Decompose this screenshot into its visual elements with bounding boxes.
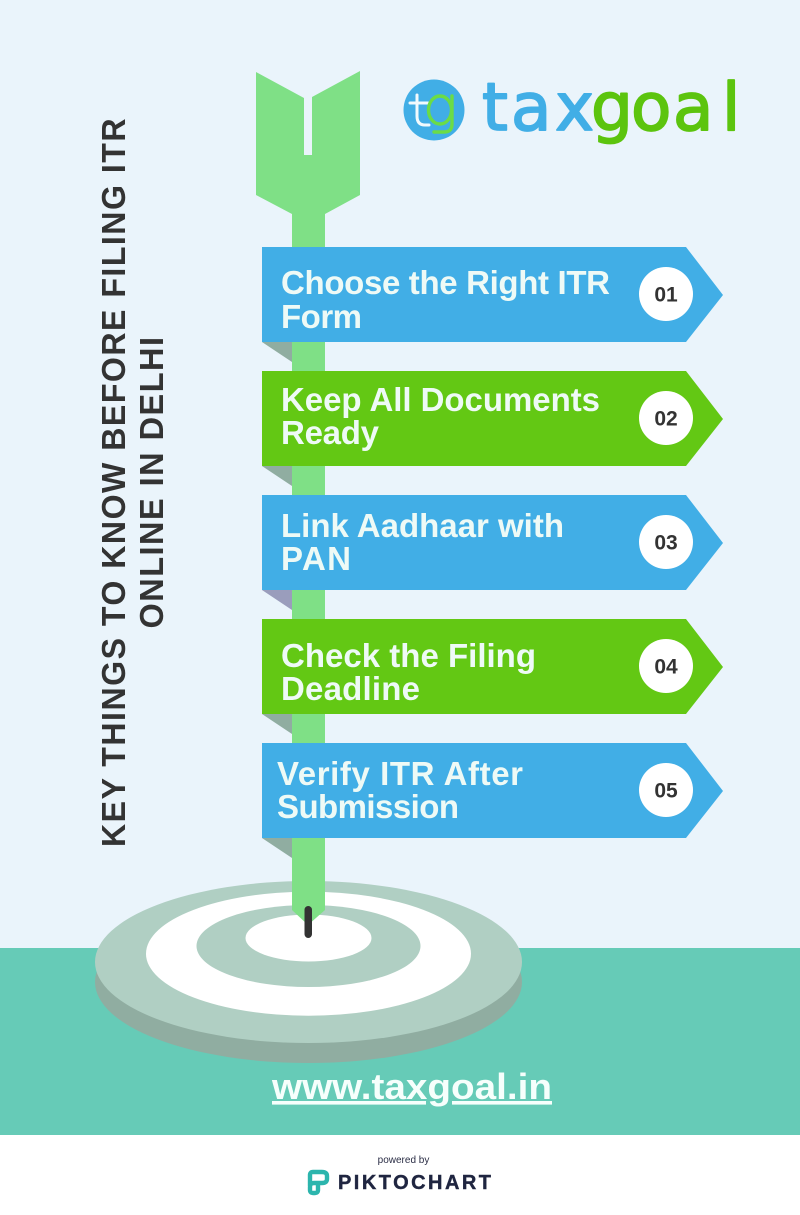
step 4: check the filing deadline: Deadline	[281, 670, 420, 707]
step 4: check the filing deadline: 04	[654, 656, 678, 678]
step 5: verify ITR after submission	[262, 743, 723, 858]
title: key things to know	[95, 117, 170, 847]
logo: taxgoal	[404, 69, 740, 146]
logo: taxgoal: goal	[591, 69, 740, 146]
footer: powered by piktochart: PIKTOCHART	[338, 1172, 491, 1194]
step 4: check the filing deadline	[262, 619, 723, 734]
step 3: link aadhaar with PAN: 03	[654, 532, 678, 554]
website url: www.taxgoal.in	[271, 1066, 552, 1107]
footer: powered by piktochart	[310, 1155, 491, 1194]
step 2: keep all documents ready	[262, 371, 723, 486]
arrow	[256, 71, 360, 938]
step 5: verify ITR after submission: Verify ITR After	[277, 755, 523, 792]
title: key things to know: ONLINE IN DELHI	[133, 336, 170, 628]
footer: powered by piktochart: powered by	[378, 1155, 429, 1166]
title: key things to know: KEY THINGS TO KNOW BEFORE FILING ITR	[95, 117, 132, 847]
step 3: link aadhaar with PAN	[262, 495, 723, 610]
step 5: verify ITR after submission: 05	[654, 780, 678, 802]
logo: taxgoal: tax	[482, 69, 594, 146]
step 1: choose the right ITR form: Choose the Right ITR	[281, 264, 610, 301]
step 3: link aadhaar with PAN: Link Aadhaar with	[281, 507, 564, 544]
step 2: keep all documents ready: 02	[654, 408, 678, 430]
step 2: keep all documents ready: Keep All Documents	[281, 381, 600, 418]
step 4: check the filing deadline: Check the Filing	[281, 637, 536, 674]
step 1: choose the right ITR form: Form	[281, 298, 362, 335]
step 1: choose the right ITR form	[262, 247, 723, 362]
step 2: keep all documents ready: Ready	[281, 414, 380, 451]
step 3: link aadhaar with PAN: PAN	[281, 540, 351, 577]
target board	[95, 881, 522, 1063]
step 1: choose the right ITR form: 01	[654, 284, 678, 306]
step 5: verify ITR after submission: Submission	[277, 788, 459, 825]
